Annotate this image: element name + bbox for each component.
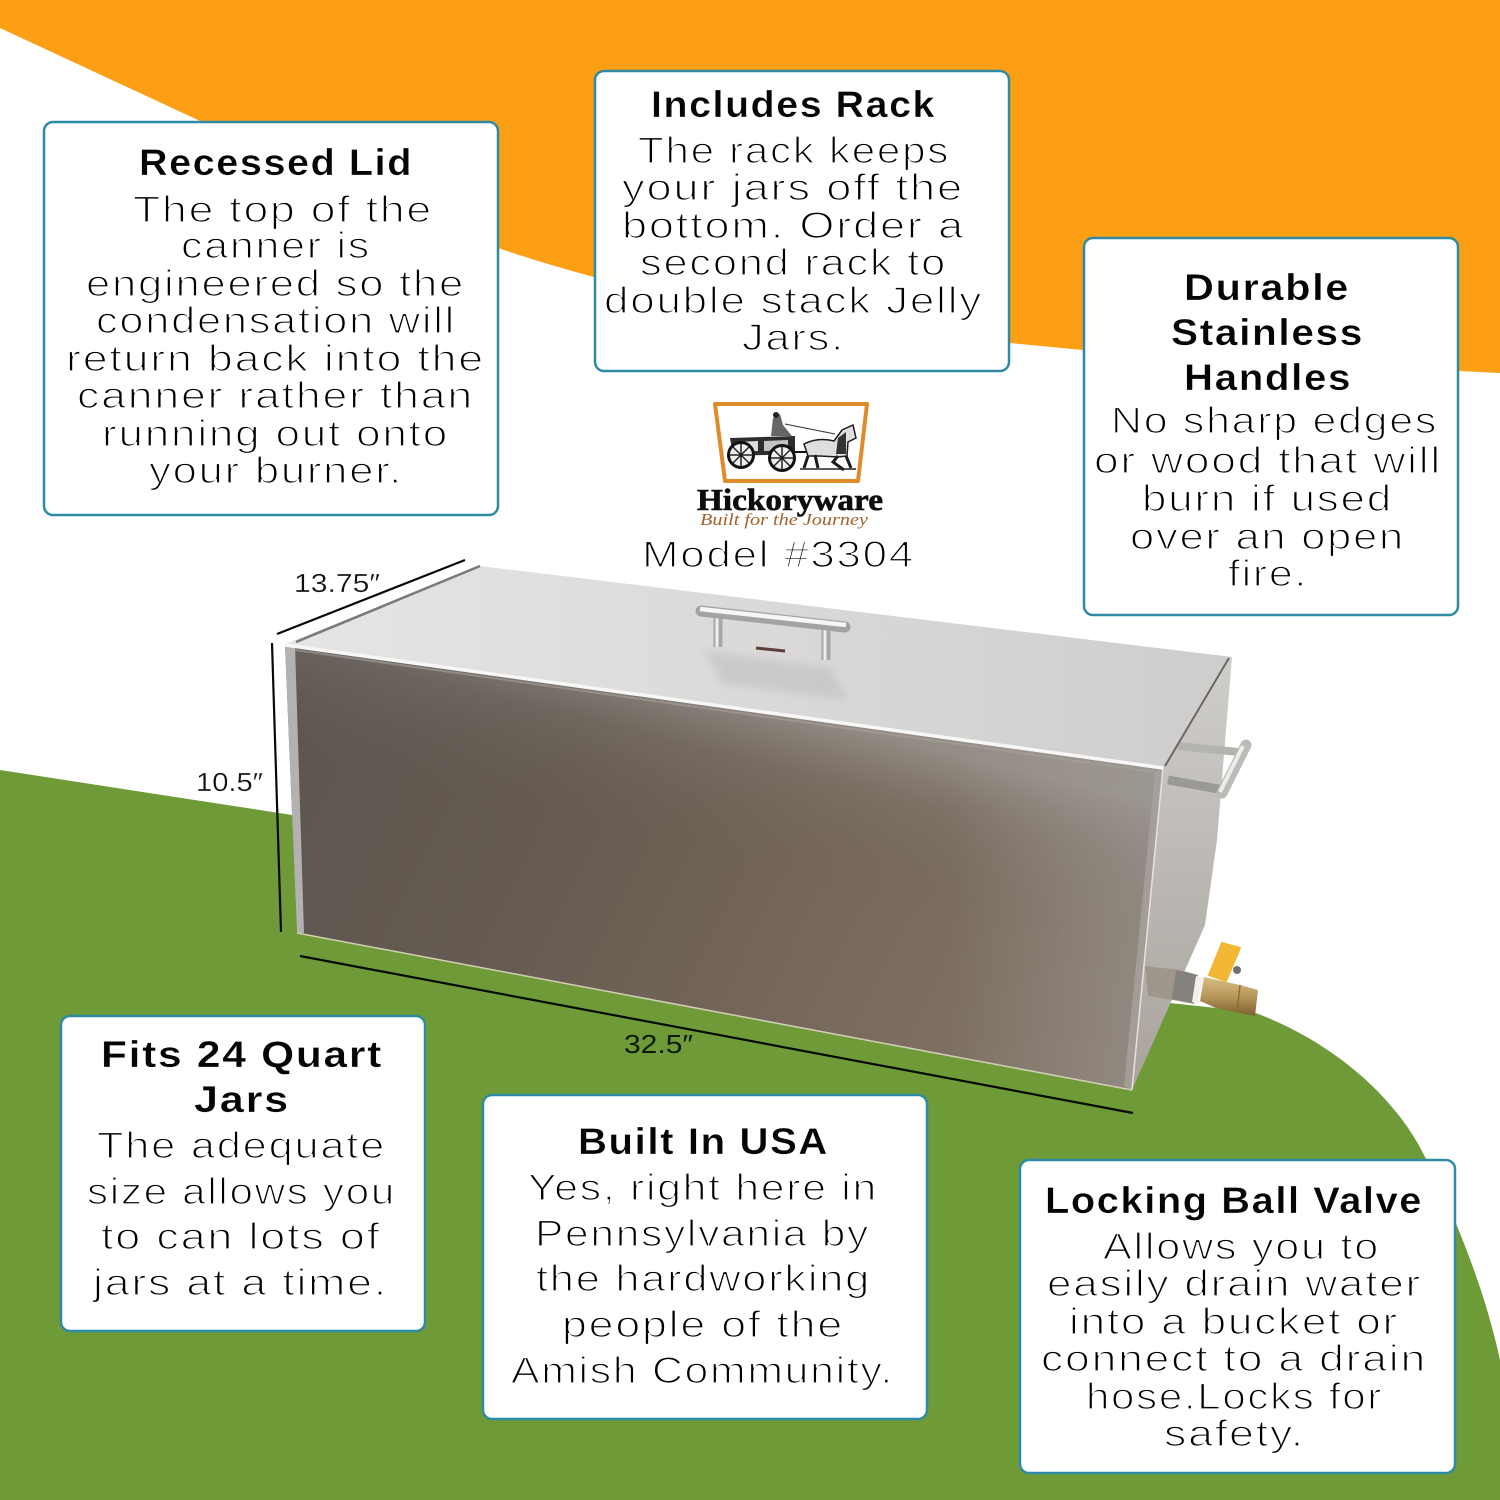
body text: hose.Locks for (1086, 1376, 1383, 1417)
model number: Model #3304 (642, 534, 915, 575)
body text: double stack Jelly (604, 280, 983, 321)
heading: Durable (1184, 267, 1350, 308)
tagline: Built for the Journey (700, 510, 869, 529)
body text (604, 130, 983, 358)
right side panel (1132, 657, 1232, 1090)
heading (101, 1034, 383, 1120)
front right bright edge (1124, 768, 1163, 1090)
bottom edge highlight (297, 933, 1132, 1090)
logo frame (715, 404, 867, 481)
body text: the hardworking (536, 1258, 871, 1299)
body text: Pennsylvania by (535, 1213, 870, 1254)
dimension: length: 32.5″ (624, 1029, 693, 1059)
body text: people of the (562, 1304, 844, 1345)
body text: into a bucket or (1069, 1301, 1399, 1342)
dimension lines (272, 560, 1133, 1113)
body text (87, 1125, 396, 1303)
panel: Durable Stainless Handles (1084, 238, 1458, 615)
body text: size allows you (87, 1171, 396, 1212)
body text: easily drain water (1047, 1263, 1422, 1304)
dimension: height: 10.5″ (196, 767, 263, 797)
heading (1171, 267, 1364, 398)
heading: Locking Ball Valve (1045, 1180, 1423, 1221)
body text: connect to a drain (1041, 1338, 1427, 1379)
panel: Locking Ball Valve (1020, 1160, 1455, 1473)
canner product photo (285, 566, 1258, 1090)
heading: Fits 24 Quart (101, 1034, 383, 1075)
body text: bottom. Order a (622, 205, 965, 246)
body text (511, 1167, 894, 1391)
body text: canner rather than (77, 375, 474, 416)
lid back edge shading (296, 566, 480, 642)
heading: Includes Rack (651, 84, 936, 125)
side handle (1168, 745, 1246, 793)
panel: Includes Rack (595, 71, 1009, 371)
icon: horse-drawn wagon (728, 412, 856, 470)
body text: The top of the (133, 189, 433, 230)
panel: Recessed Lid (44, 122, 498, 515)
body text (1094, 400, 1442, 594)
panel: Fits 24 Quart Jars (61, 1016, 425, 1331)
dimension: depth: 13.75″ (294, 568, 380, 598)
panel: Built In USA (483, 1095, 927, 1419)
body text: your burner. (149, 450, 403, 491)
body text: jars at a time. (92, 1262, 388, 1303)
heading: Built In USA (578, 1121, 829, 1162)
heading: Jars (194, 1079, 290, 1120)
body text: running out onto (102, 413, 449, 454)
heading: Recessed Lid (139, 142, 413, 183)
body text: over an open (1130, 516, 1405, 557)
front lid rim highlight (285, 645, 1163, 768)
body text (66, 189, 485, 491)
body text: condensation will (96, 300, 456, 341)
body text: canner is (181, 225, 371, 266)
body text: or wood that will (1094, 440, 1442, 481)
logo: Hickoryware (697, 404, 883, 529)
body text: The rack keeps (638, 130, 950, 171)
body text: safety. (1164, 1413, 1305, 1454)
lid top (285, 566, 1232, 768)
body text: engineered so the (86, 263, 465, 304)
heading: Stainless (1171, 312, 1364, 353)
drain valve (1145, 943, 1258, 1016)
front face (285, 644, 1163, 1090)
front left bright corner strip (285, 644, 304, 933)
heading: Handles (1184, 357, 1352, 398)
body text: second rack to (640, 242, 947, 283)
body text (1041, 1226, 1427, 1454)
green background shape (0, 770, 1500, 1500)
body text: No sharp edges (1111, 400, 1438, 441)
brand name: Hickoryware (697, 482, 883, 517)
lid handle (700, 609, 846, 660)
body text: Allows you to (1103, 1226, 1380, 1267)
body text: Jars. (742, 317, 845, 358)
body text: your jars off the (622, 167, 964, 208)
body text: Yes, right here in (528, 1167, 878, 1208)
body text: Amish Community. (511, 1350, 894, 1391)
orange background shape (0, 0, 1500, 373)
body text: The adequate (97, 1125, 386, 1166)
body text: to can lots of (101, 1216, 381, 1257)
body text: fire. (1228, 553, 1308, 594)
body text: burn if used (1142, 478, 1393, 519)
lid handle shadow (704, 650, 848, 700)
body text: return back into the (66, 338, 485, 379)
